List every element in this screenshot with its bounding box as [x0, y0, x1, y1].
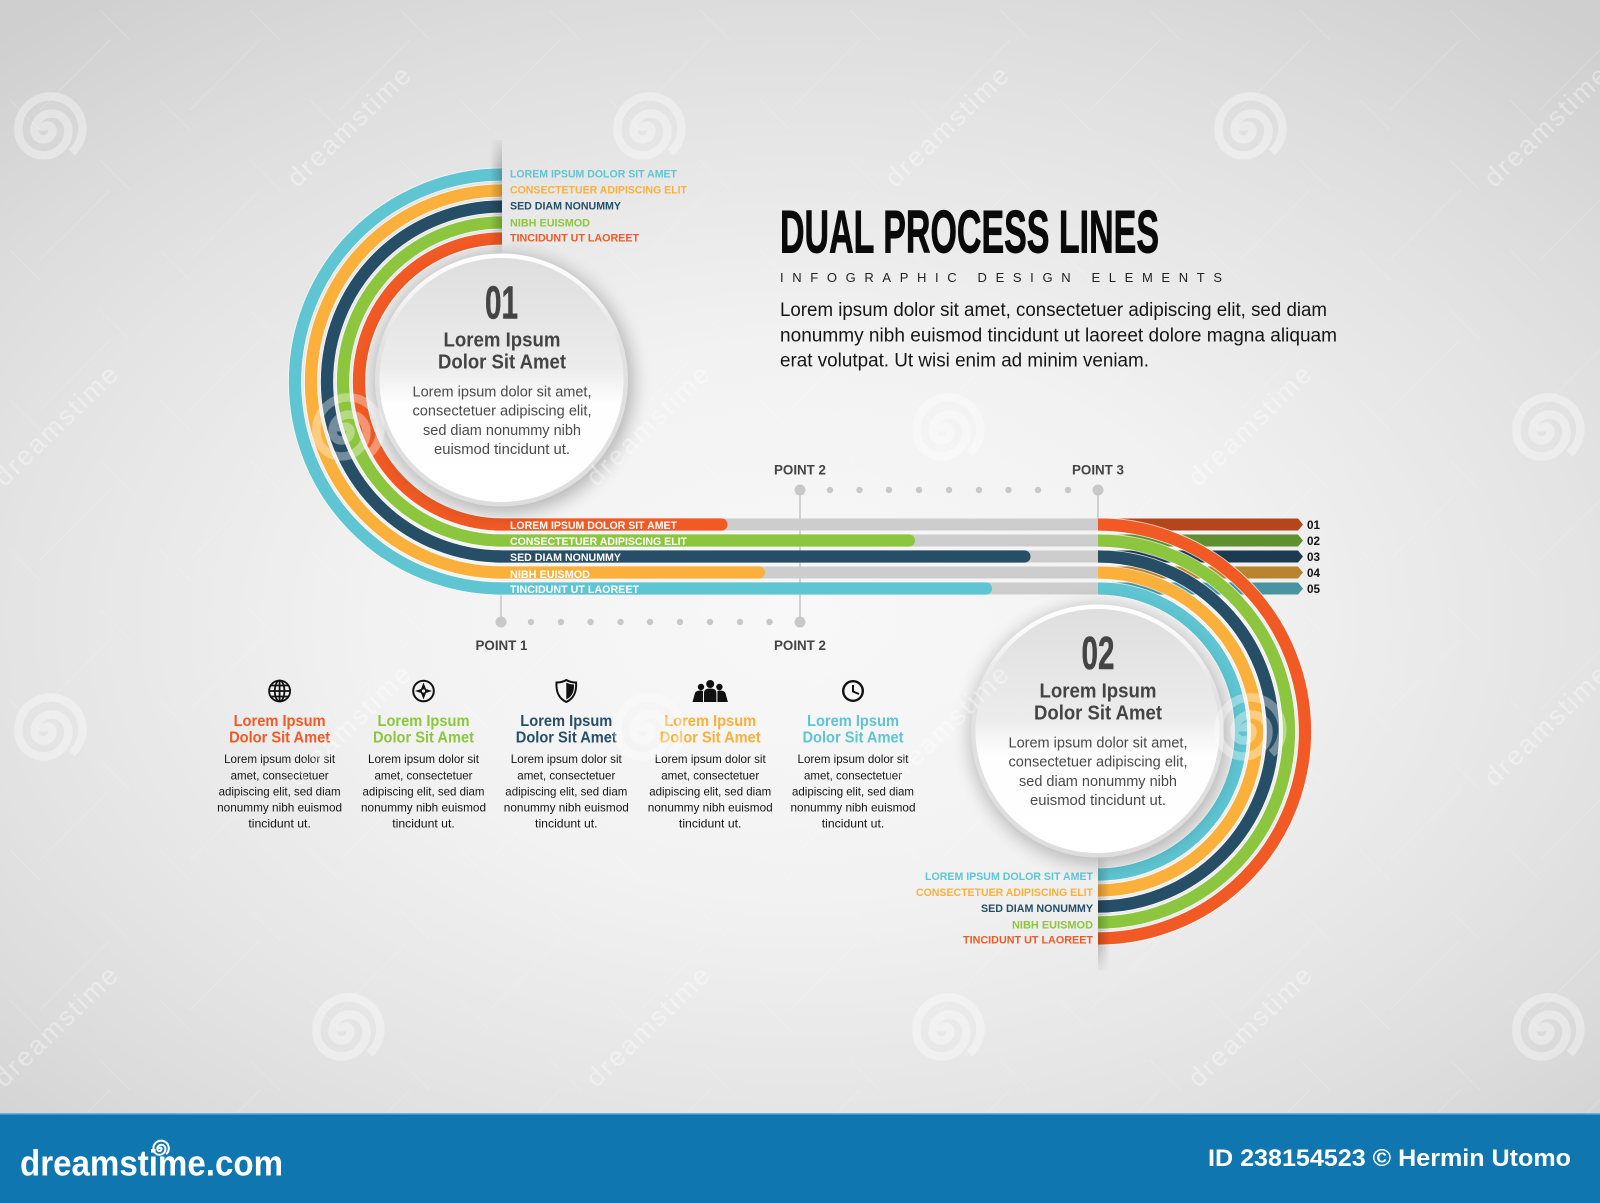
top list labels: LOREM IPSUM DOLOR SIT AMET — [510, 168, 677, 180]
point labels: POINT 3 — [1072, 462, 1124, 478]
watermark text: dreamstime — [281, 60, 417, 193]
circle 02 body text: consectetuer adipiscing elit, — [1008, 754, 1188, 770]
circle 02 body text — [1008, 734, 1188, 809]
body text: amet, consectetuer — [374, 768, 472, 782]
body text: tincidunt ut. — [822, 817, 884, 831]
number 02: 02 — [1082, 627, 1114, 679]
watermark text: dreamstime — [1182, 960, 1318, 1093]
body text — [790, 752, 916, 831]
body text: amet, consectetuer — [661, 768, 759, 782]
circle 02 body text: sed diam nonummy nibh — [1019, 773, 1177, 790]
body text — [361, 752, 486, 831]
colored progress bars — [490, 518, 1030, 595]
body text: Lorem ipsum dolor sit — [511, 752, 622, 766]
body text — [648, 752, 773, 831]
subtitle: INFOGRAPHIC DESIGN ELEMENTS — [780, 270, 1222, 285]
footer bar — [0, 1113, 1600, 1203]
point labels — [476, 462, 1124, 653]
body text — [504, 752, 629, 831]
fold shadows — [490, 140, 1110, 970]
circle 01 body text: euismod tincidunt ut. — [434, 441, 570, 458]
arrow numbers: 01 — [1307, 520, 1321, 532]
heading — [229, 713, 330, 746]
point labels: POINT 1 — [476, 638, 528, 653]
heading — [802, 713, 904, 746]
body text: adipiscing elit, sed diam — [362, 784, 484, 798]
arrows: right ends of the process rows — [1098, 518, 1303, 594]
top list labels — [510, 168, 687, 244]
icon: compass — [413, 681, 434, 701]
circle 02 heading — [1034, 680, 1162, 724]
bottom list labels: CONSECTETUER ADIPISCING ELIT — [916, 887, 1093, 899]
top list labels: SED DIAM NONUMMY — [510, 200, 621, 212]
right arc bundle — [1098, 524, 1305, 938]
number 01: 01 — [485, 276, 518, 328]
arrow numbers: 02 — [1307, 536, 1320, 548]
bar labels: TINCIDUNT UT LAOREET — [510, 584, 639, 596]
icon: people — [692, 680, 728, 702]
body text: nonummy nibh euismod — [790, 801, 916, 815]
circle panel 01 — [375, 254, 633, 513]
body text: Lorem ipsum dolor sit — [368, 752, 480, 766]
top list labels: CONSECTETUER ADIPISCING ELIT — [510, 184, 687, 196]
body text: adipiscing elit, sed diam — [505, 784, 627, 798]
watermark text: dreamstime — [580, 960, 716, 1093]
body text: nonummy nibh euismod — [361, 801, 486, 815]
watermark text: dreamstime — [879, 60, 1015, 193]
arrow numbers: 03 — [1307, 552, 1320, 564]
bar labels: SED DIAM NONUMMY — [510, 552, 621, 564]
arrow numbers: 05 — [1307, 584, 1321, 596]
heading — [660, 713, 761, 746]
circle 01 body text: consectetuer adipiscing elit, — [412, 403, 592, 420]
bottom list labels: LOREM IPSUM DOLOR SIT AMET — [925, 871, 1093, 883]
top list labels: TINCIDUNT UT LAOREET — [510, 232, 639, 244]
title: DUAL PROCESS LINES — [780, 199, 1159, 266]
circle 01 body text — [412, 384, 592, 458]
heading: Lorem Ipsum — [664, 713, 756, 730]
circle 01 body text: Lorem ipsum dolor sit amet, — [412, 384, 592, 401]
watermark spirals — [18, 96, 1580, 1057]
point labels: POINT 2 — [774, 462, 826, 478]
heading: Lorem Ipsum — [234, 713, 326, 730]
circle 01 heading — [438, 330, 566, 374]
body text: amet, consectetuer — [804, 768, 902, 782]
heading: Lorem Ipsum — [378, 713, 470, 730]
column 5: clock — [790, 681, 916, 831]
column 2: compass — [361, 681, 486, 831]
body text: tincidunt ut. — [535, 817, 598, 831]
bar labels — [510, 520, 687, 596]
column 3: shield — [504, 680, 629, 831]
heading: Dolor Sit Amet — [516, 729, 617, 746]
body text: tincidunt ut. — [679, 817, 741, 831]
watermark text: dreamstime — [879, 659, 1015, 792]
watermark text: dreamstime — [580, 359, 716, 492]
icon: globe — [269, 680, 290, 702]
watermark text: dreamstime — [1182, 359, 1318, 492]
heading — [373, 713, 474, 746]
bar labels: CONSECTETUER ADIPISCING ELIT — [510, 536, 687, 548]
heading: Dolor Sit Amet — [229, 729, 330, 746]
body text: Lorem ipsum dolor sit — [224, 752, 336, 766]
body text — [217, 752, 342, 831]
watermark text: dreamstime — [281, 659, 417, 792]
circle 01 heading: Lorem Ipsum — [444, 330, 560, 352]
body text: tincidunt ut. — [392, 817, 455, 831]
heading: Lorem Ipsum — [520, 713, 612, 730]
body text: adipiscing elit, sed diam — [792, 784, 914, 798]
heading: Dolor Sit Amet — [373, 729, 474, 746]
intro paragraph: erat volutpat. Ut wisi enim ad minim veniam. — [780, 351, 1149, 372]
body text: Lorem ipsum dolor sit — [655, 752, 766, 766]
bar labels: NIBH EUISMOD — [510, 569, 590, 581]
bottom list labels: NIBH EUISMOD — [1012, 920, 1093, 932]
circle panel 02 — [970, 604, 1228, 864]
body text: nonummy nibh euismod — [504, 801, 629, 815]
icon: shield — [556, 680, 576, 702]
column 4: people — [648, 680, 773, 831]
circle 02 heading: Dolor Sit Amet — [1034, 702, 1162, 724]
bottom list labels — [916, 871, 1093, 946]
bottom list labels: TINCIDUNT UT LAOREET — [963, 934, 1093, 946]
circle 02 body text: Lorem ipsum dolor sit amet, — [1008, 734, 1188, 752]
body text: Lorem ipsum dolor sit — [798, 752, 909, 766]
body text: tincidunt ut. — [248, 817, 311, 831]
point markers and dotted lines — [496, 484, 1104, 628]
footer credit: ID 238154523 © Hermin Utomo — [1208, 1145, 1571, 1172]
bar labels: LOREM IPSUM DOLOR SIT AMET — [510, 520, 677, 532]
heading: Dolor Sit Amet — [802, 729, 904, 746]
icon: clock — [843, 681, 863, 701]
heading: Dolor Sit Amet — [660, 729, 761, 746]
bottom list labels: SED DIAM NONUMMY — [981, 903, 1093, 915]
heading — [516, 713, 617, 746]
intro paragraph: Lorem ipsum dolor sit amet, consectetuer adipiscing elit, sed diam — [780, 300, 1327, 321]
column 1: globe — [217, 680, 342, 831]
arrow numbers — [1307, 520, 1321, 596]
body text: nonummy nibh euismod — [648, 801, 773, 815]
top list labels: NIBH EUISMOD — [510, 218, 590, 230]
body text: nonummy nibh euismod — [217, 801, 342, 815]
body text: adipiscing elit, sed diam — [219, 784, 341, 798]
intro paragraph: nonummy nibh euismod tincidunt ut laoreet dolore magna aliquam — [780, 326, 1337, 347]
heading: Lorem Ipsum — [807, 713, 899, 730]
bar track rows — [502, 518, 1098, 594]
circle 01 body text: sed diam nonummy nibh — [423, 422, 581, 439]
body text: amet, consectetuer — [517, 768, 615, 782]
intro paragraph — [780, 300, 1337, 372]
body text: adipiscing elit, sed diam — [649, 784, 771, 798]
arrow numbers: 04 — [1307, 568, 1321, 580]
circle 01 heading: Dolor Sit Amet — [438, 352, 566, 374]
left arc bundle — [295, 174, 502, 588]
point labels: POINT 2 — [774, 638, 826, 653]
circle 02 body text: euismod tincidunt ut. — [1030, 792, 1166, 809]
body text: amet, consectetuer — [231, 768, 329, 782]
circle 02 heading: Lorem Ipsum — [1040, 680, 1156, 702]
footer logo: dreamstime.com — [20, 1143, 283, 1184]
